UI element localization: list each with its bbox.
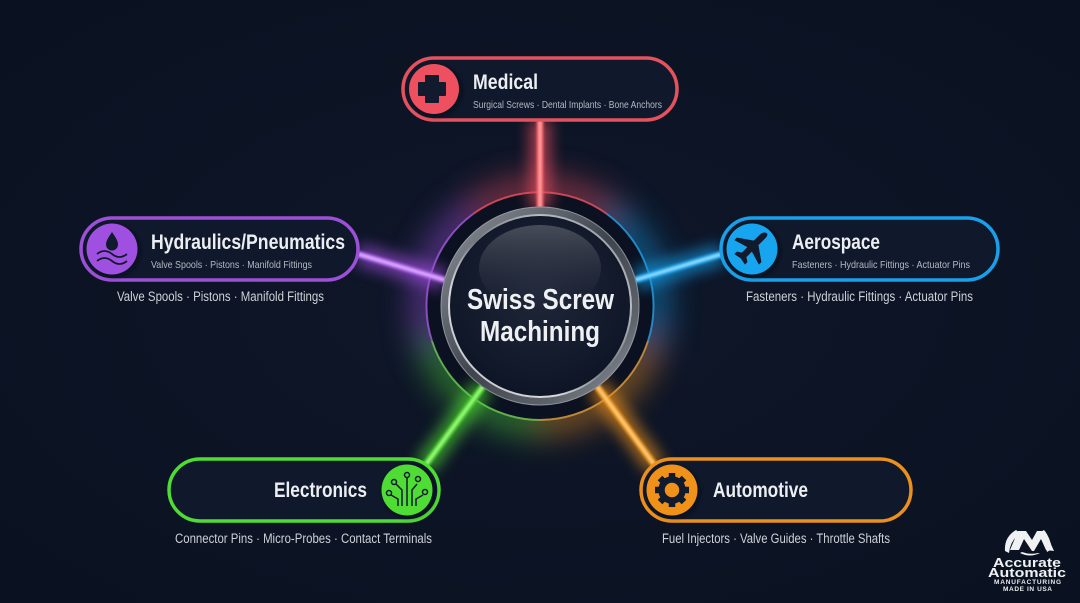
hub inner highlight [449,215,631,397]
medical title: Medical [473,71,538,94]
center glow [426,192,654,420]
automotive pill [641,459,911,521]
aerospace pill [721,218,998,280]
hub title: Swiss Screw [467,284,614,316]
connector: electronics [424,385,484,467]
hydraulics caption: Valve Spools · Pistons · Manifold Fittings [117,289,324,304]
icon: circuit [382,464,434,518]
logo tagline: MANUFACTURING [994,579,1061,586]
panel: aerospace [721,218,998,280]
connector: hydraulics [358,254,445,280]
connector: automotive [596,385,656,467]
hydraulics title: Hydraulics/Pneumatics [151,231,345,254]
icon: water drop and waves [86,224,140,276]
connector: medical [529,120,551,208]
icon: airplane [726,224,780,276]
panel: medical [403,58,677,120]
hydraulics items: Valve Spools · Pistons · Manifold Fittings [151,259,312,271]
panel: hydraulics/pneumatics [81,218,358,280]
icon: medical cross [409,64,462,116]
hub dark base [427,193,653,419]
panel: automotive [641,459,911,521]
logo mark [1005,530,1054,556]
logo tagline: MADE IN USA [1003,586,1052,593]
logo: Accurate Automatic [988,530,1066,593]
aerospace caption: Fasteners · Hydraulic Fittings · Actuator Pins [746,289,973,304]
medical pill [403,58,677,120]
electronics caption: Connector Pins · Micro-Probes · Contact Terminals [175,531,432,546]
hub disc [450,216,630,396]
hub gloss [479,225,601,311]
hub title: Machining [480,316,600,348]
electronics title: Electronics [274,479,367,502]
central hub [441,207,639,405]
hub silver bezel [444,210,636,402]
icon: gear [646,464,700,518]
connector: aerospace [635,254,722,280]
hydraulics pill [81,218,358,280]
electronics pill [169,459,439,521]
panel: electronics [169,459,439,521]
hub coloured ring [426,192,654,420]
hub outer highlight [441,207,639,405]
logo wordmark: Automatic [988,566,1066,580]
automotive caption: Fuel Injectors · Valve Guides · Throttle Shafts [662,531,890,546]
central hub base [426,192,654,420]
aerospace items: Fasteners · Hydraulic Fittings · Actuator Pins [792,259,970,271]
logo wordmark: Accurate [993,556,1061,570]
automotive title: Automotive [713,479,808,502]
medical items: Surgical Screws · Dental Implants · Bone Anchors [473,99,662,111]
aerospace title: Aerospace [792,231,880,254]
